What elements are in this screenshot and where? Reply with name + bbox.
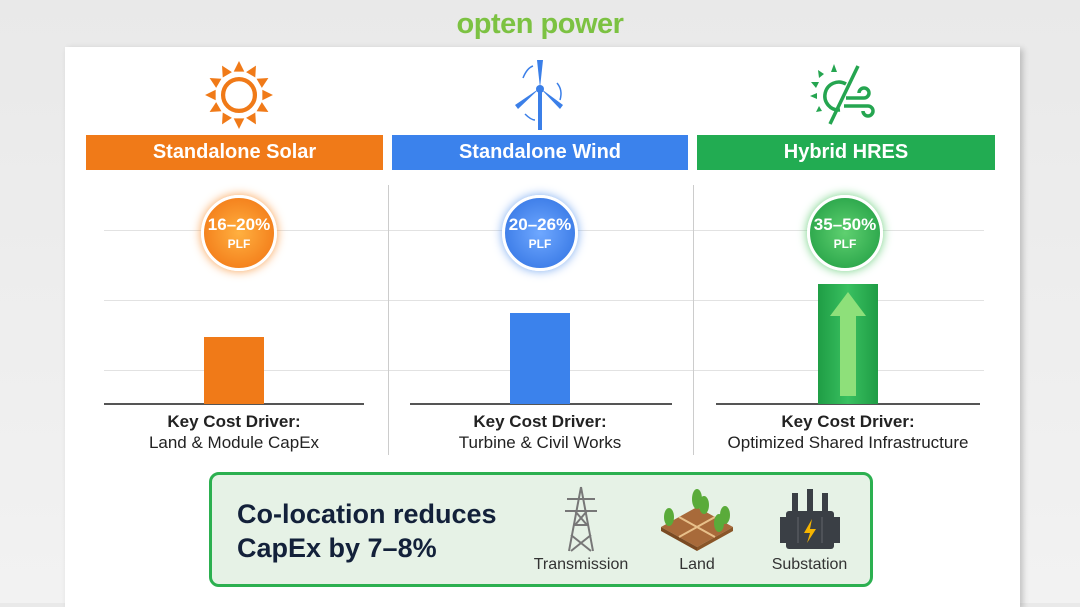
header: Standalone Solar: Standalone Solar	[153, 141, 316, 163]
icon: transmission: Transmission	[534, 556, 628, 573]
icon: hybrid sun-wind	[810, 64, 875, 125]
icon: land	[661, 489, 733, 573]
circle: solar PLF: 16–20%	[208, 215, 270, 234]
callout text: CapEx by 7–8%	[237, 533, 437, 563]
header: Standalone Wind: Standalone Wind	[459, 141, 621, 163]
circle: wind PLF	[502, 195, 578, 271]
caption: hybrid	[728, 412, 968, 452]
bar: solar	[204, 337, 264, 404]
caption: solar: Key Cost Driver:	[167, 412, 301, 431]
caption: wind: Turbine & Civil Works	[459, 433, 621, 452]
icon: transmission	[534, 486, 628, 573]
circle: solar PLF	[201, 195, 277, 271]
header: Hybrid HRES: Hybrid HRES	[784, 141, 908, 163]
circle: hybrid PLF	[807, 195, 883, 271]
logo: opten power	[457, 8, 623, 40]
icon: wind turbine	[515, 60, 563, 130]
caption: hybrid: Key Cost Driver:	[781, 412, 915, 431]
icon: land: Land	[679, 556, 715, 573]
icon: substation: Substation	[772, 556, 847, 573]
caption: solar	[149, 412, 319, 452]
callout text	[237, 499, 497, 563]
caption: hybrid: Optimized Shared Infrastructure	[728, 433, 968, 452]
circle: solar PLF: PLF	[228, 237, 250, 251]
circle: hybrid PLF: PLF	[834, 237, 856, 251]
icon: substation	[772, 489, 847, 573]
circle: hybrid PLF: 35–50%	[814, 215, 876, 234]
bar: wind	[510, 313, 570, 404]
bar: hybrid with arrow	[818, 284, 878, 404]
caption: wind	[459, 412, 621, 452]
header: Standalone Solar	[86, 135, 383, 170]
header: Standalone Wind	[392, 135, 688, 170]
circle: wind PLF: PLF	[529, 237, 551, 251]
caption: wind: Key Cost Driver:	[473, 412, 607, 431]
circle: wind PLF: 20–26%	[509, 215, 571, 234]
header: Hybrid HRES	[697, 135, 995, 170]
caption: solar: Land & Module CapEx	[149, 433, 319, 452]
callout: co-location	[209, 472, 873, 587]
icon: sun	[205, 61, 273, 129]
callout text: Co-location reduces	[237, 499, 497, 529]
